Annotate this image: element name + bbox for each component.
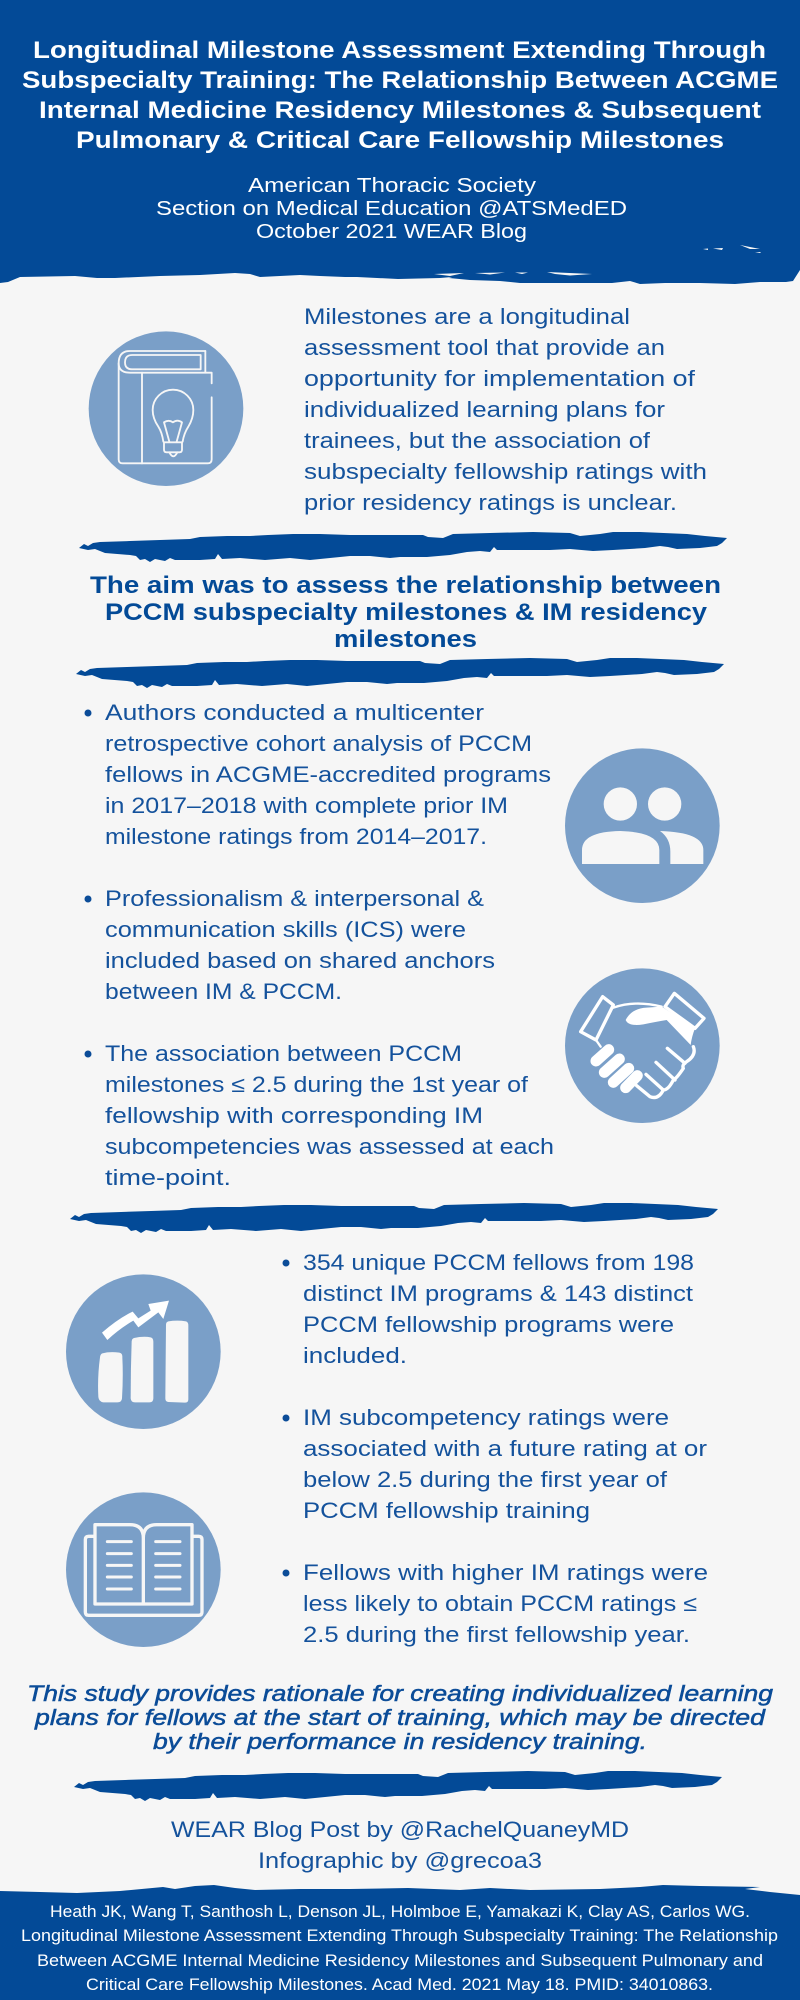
icon: two people	[565, 748, 720, 903]
title: Longitudinal Milestone Assessment Extending Through	[33, 37, 766, 64]
bullet: cohort analysis: Authors conducted a multicenter	[105, 700, 484, 725]
bullet: unique fellows: included.	[303, 1343, 407, 1368]
title	[22, 37, 778, 154]
citation text: Critical Care Fellowship Milestones. Acad Med. 2021 May 18. PMID: 34010863.	[86, 1975, 713, 1994]
brush stroke divider 1	[79, 532, 727, 562]
bullet: professionalism and ICS: between IM & PCCM.	[105, 979, 342, 1004]
citation text: Longitudinal Milestone Assessment Extending Through Subspecialty Training: The Relationship	[21, 1926, 778, 1945]
aim heading: milestones	[334, 626, 477, 653]
bullet: association assessed: time-point.	[105, 1165, 231, 1190]
bullet: IM ratings associated: below 2.5 during the first year of	[303, 1467, 668, 1492]
panel: methods bullets	[84, 700, 554, 1190]
bullet: higher IM ratings	[282, 1560, 708, 1647]
bullet: IM ratings associated: PCCM fellowship training	[303, 1498, 590, 1523]
title: Subspecialty Training: The Relationship Between ACGME	[22, 67, 778, 94]
bullet: cohort analysis: fellows in ACGME-accredited programs	[105, 762, 551, 787]
intro text block: Milestones are a longitudinal	[304, 304, 630, 329]
bullet: unique fellows	[282, 1250, 694, 1368]
intro text block: opportunity for implementation of	[304, 366, 696, 391]
bullet: association assessed: milestones ≤ 2.5 during the 1st year of	[105, 1072, 529, 1097]
aim heading	[90, 572, 721, 653]
bullet: professionalism and ICS: included based on shared anchors	[105, 948, 495, 973]
icon: book with lightbulb	[89, 331, 243, 486]
panel: footer citation	[0, 1885, 800, 2000]
bullet: professionalism and ICS: Professionalism & interpersonal &	[105, 886, 484, 911]
bullet: cohort analysis: retrospective cohort analysis of PCCM	[105, 731, 532, 756]
title: Pulmonary & Critical Care Fellowship Milestones	[76, 127, 724, 154]
bullet: cohort analysis: milestone ratings from 2014–2017.	[105, 824, 487, 849]
icon: handshake	[565, 968, 720, 1123]
citation text: Between ACGME Internal Medicine Residency Milestones and Subsequent Pulmonary and	[37, 1951, 763, 1970]
conclusion statement	[27, 1681, 774, 1754]
bullet: association assessed: fellowship with corresponding IM	[105, 1103, 483, 1128]
bullet: unique fellows: distinct IM programs & 143 distinct	[303, 1281, 693, 1306]
bullet: IM ratings associated: associated with a future rating at or	[303, 1436, 707, 1461]
panel: header	[0, 0, 800, 284]
bullet: association assessed: The association between PCCM	[105, 1041, 462, 1066]
bullet: IM ratings associated	[282, 1405, 707, 1523]
bullet: association assessed: subcompetencies was assessed at each	[105, 1134, 554, 1159]
bullet: professionalism and ICS: communication skills (ICS) were	[105, 917, 466, 942]
brush stroke divider 2	[76, 658, 724, 688]
bullet: unique fellows: 354 unique PCCM fellows from 198	[303, 1250, 694, 1275]
icon: bar chart with rising arrow	[66, 1274, 221, 1429]
citation text	[21, 1902, 778, 1994]
bullet: unique fellows: PCCM fellowship programs were	[303, 1312, 674, 1337]
bullet: cohort analysis: in 2017–2018 with complete prior IM	[105, 793, 508, 818]
brush stroke divider 4	[74, 1771, 722, 1801]
icon: open book	[66, 1492, 221, 1647]
aim heading: The aim was to assess the relationship between	[90, 572, 721, 599]
bullet: higher IM ratings: less likely to obtain PCCM ratings ≤	[303, 1591, 697, 1616]
subtitle: society and date: American Thoracic Society	[248, 175, 536, 197]
subtitle: society and date: Section on Medical Education @ATSMedED	[156, 198, 627, 220]
credits: Infographic by @grecoa3	[258, 1848, 542, 1873]
aim heading: PCCM subspecialty milestones & IM residency	[105, 599, 708, 626]
intro text block: prior residency ratings is unclear.	[304, 490, 677, 515]
intro text block: trainees, but the association of	[304, 428, 651, 453]
brush stroke divider 3	[70, 1203, 718, 1233]
subtitle: society and date: October 2021 WEAR Blog	[256, 221, 527, 243]
bullet: IM ratings associated: IM subcompetency ratings were	[303, 1405, 669, 1430]
panel: results bullets	[282, 1250, 708, 1647]
bullet: association assessed	[84, 1041, 554, 1190]
intro text block: assessment tool that provide an	[304, 335, 665, 360]
credits: WEAR Blog Post by @RachelQuaneyMD	[171, 1817, 629, 1842]
subtitle: society and date	[156, 175, 627, 243]
intro text block: subspecialty fellowship ratings with	[304, 459, 707, 484]
conclusion statement: by their performance in residency training.	[153, 1729, 647, 1754]
title: Internal Medicine Residency Milestones & Subsequent	[39, 97, 761, 124]
credits	[171, 1817, 629, 1873]
bullet: cohort analysis	[84, 700, 551, 849]
intro text block: individualized learning plans for	[304, 397, 665, 422]
citation text: Heath JK, Wang T, Santhosh L, Denson JL, Holmboe E, Yamakazi K, Clay AS, Carlos WG.	[50, 1902, 750, 1921]
bullet: higher IM ratings: 2.5 during the first fellowship year.	[303, 1622, 690, 1647]
conclusion statement: plans for fellows at the start of training, which may be directed	[34, 1705, 766, 1730]
bullet: professionalism and ICS	[84, 886, 495, 1004]
bullet: higher IM ratings: Fellows with higher IM ratings were	[303, 1560, 708, 1585]
intro text block	[304, 304, 707, 515]
conclusion statement: This study provides rationale for creating individualized learning	[27, 1681, 774, 1706]
